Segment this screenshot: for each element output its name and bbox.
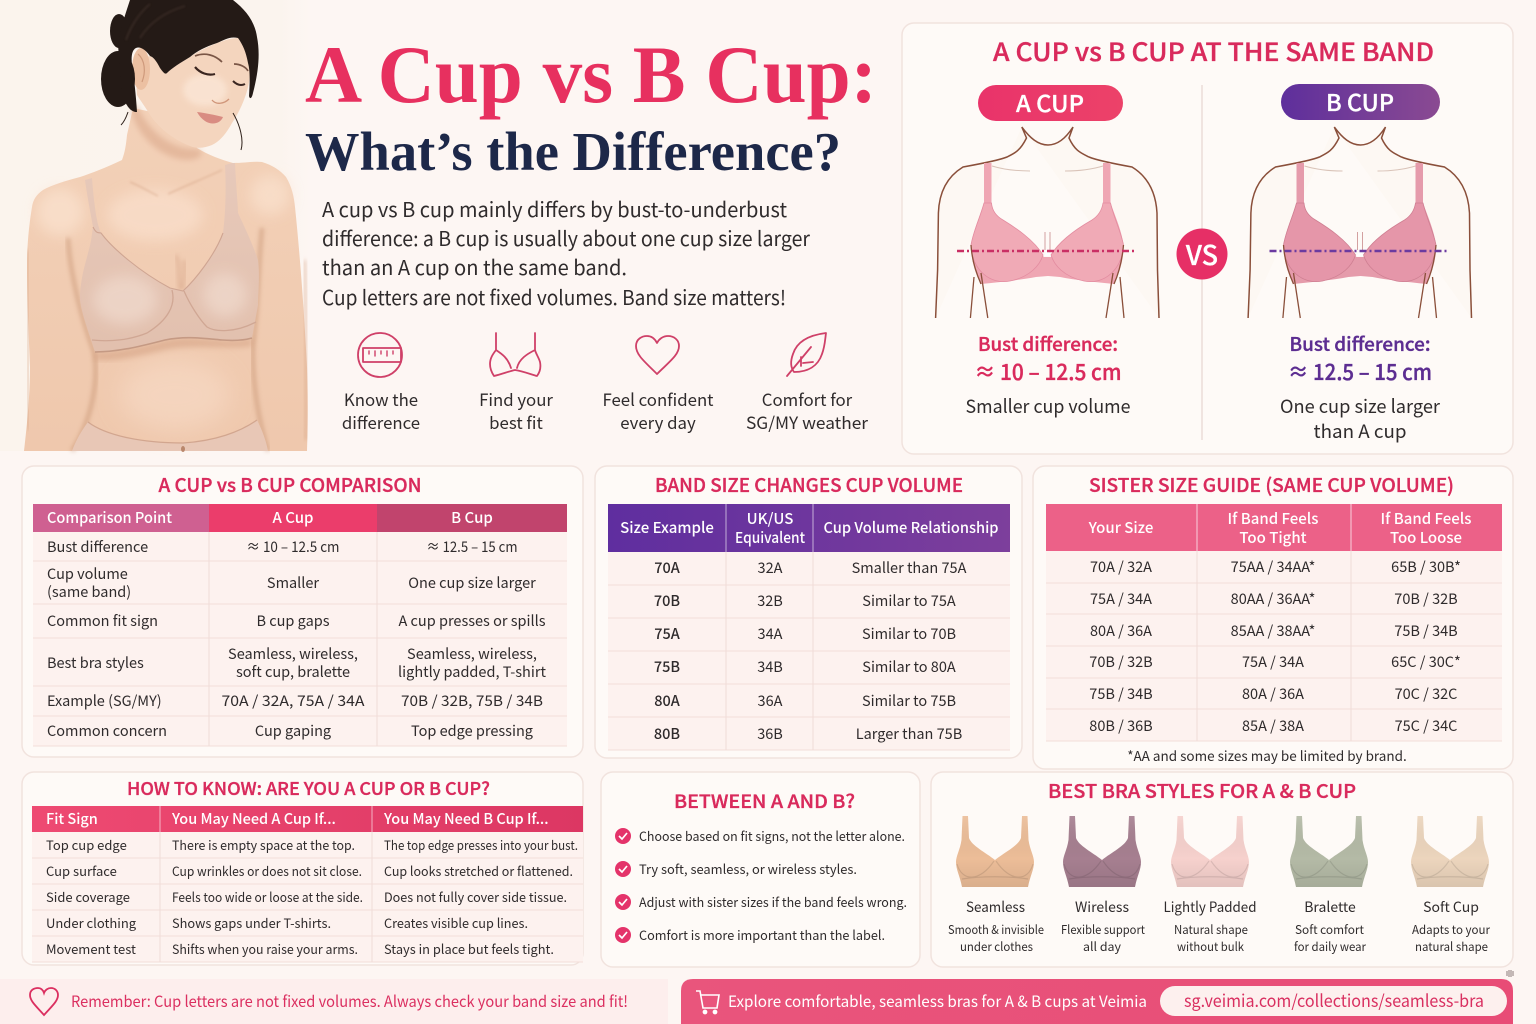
sister size table: 70B / 32B — [1089, 651, 1153, 672]
sister size table: 70A / 32A — [1090, 556, 1152, 577]
icon: heart — [636, 336, 679, 374]
sister size table: 80AA / 36AA* — [1231, 588, 1315, 609]
comparison table: 70B / 32B, 75B / 34B — [401, 690, 543, 711]
fit sign table: Shows gaps under T-shirts. — [172, 913, 331, 932]
comparison table — [33, 504, 567, 746]
intro text: difference: a B cup is usually about one cup size larger — [322, 222, 810, 252]
panel: between A and B — [601, 772, 920, 967]
comparison table: Common fit sign — [47, 610, 158, 631]
sister size table: 70C / 32C — [1395, 683, 1457, 704]
heading: SISTER SIZE GUIDE (SAME CUP VOLUME) — [1089, 471, 1454, 498]
A cup caption — [966, 330, 1130, 419]
band size table: 36B — [757, 723, 783, 744]
style: seamless: Seamless — [966, 897, 1025, 917]
style: lightly padded — [1164, 816, 1256, 955]
fit sign table: Creates visible cup lines. — [384, 913, 528, 932]
band size table: 70B — [654, 590, 680, 611]
comparison table: Cup gaping — [255, 720, 331, 741]
url pill: sg.veimia.com/collections/seamless-bra — [1184, 987, 1484, 1012]
style: seamless: under clothes — [960, 938, 1033, 955]
comparison table: B Cup — [451, 507, 493, 528]
intro text: Cup letters are not fixed volumes. Band size matters! — [322, 281, 786, 311]
band size table: 80A — [654, 690, 681, 711]
icon: leaf — [787, 333, 826, 376]
comparison table: Comparison Point — [47, 507, 172, 528]
style: wireless — [1061, 816, 1145, 955]
benefit: know the difference — [342, 333, 420, 434]
title: A Cup vs B Cup: — [305, 29, 877, 120]
comparison table: Example (SG/MY) — [47, 690, 162, 711]
intro text — [322, 193, 810, 311]
tip 3: Adjust with sister sizes if the band feels wrong. — [639, 892, 907, 911]
band size table: Smaller than 75A — [852, 557, 967, 578]
fit sign table: Side coverage — [46, 887, 130, 906]
sister size table: 75AA / 34AA* — [1231, 556, 1315, 577]
sister size table: 65B / 30B* — [1391, 556, 1461, 577]
comparison table: Seamless, wireless, — [407, 643, 537, 664]
style: soft cup — [1411, 816, 1490, 955]
comparison table: A Cup — [273, 507, 313, 528]
sister size table: 75B / 34B — [1394, 620, 1458, 641]
fit sign table: The top edge presses into your bust. — [384, 835, 578, 854]
comparison table: ≈ 12.5 – 15 cm — [426, 536, 518, 557]
style: lightly padded: without bulk — [1177, 938, 1244, 955]
style: bralette: for daily wear — [1294, 938, 1366, 955]
comparison table: Smaller — [267, 572, 319, 593]
benefit: find your best fit — [479, 333, 553, 434]
sister size table: Too Tight — [1239, 527, 1307, 548]
band size table: 75B — [654, 656, 680, 677]
style: bralette: Bralette — [1304, 897, 1356, 917]
A cup caption: ≈ 10 – 12.5 cm — [974, 355, 1122, 387]
band size table: UK/US — [747, 508, 793, 529]
A cup pill: A CUP — [1016, 85, 1084, 119]
heading: BAND SIZE CHANGES CUP VOLUME — [655, 471, 963, 498]
comparison table: Top edge pressing — [411, 720, 533, 741]
panel: A cup vs B cup at the same band — [902, 23, 1513, 454]
style: soft cup: Adapts to your — [1412, 921, 1490, 938]
comparison table: Seamless, wireless, — [228, 643, 358, 664]
panel: best bra styles — [931, 772, 1513, 967]
comparison table: A cup presses or spills — [398, 610, 546, 631]
sister size table: If Band Feels — [1228, 508, 1318, 529]
sister size table: Too Loose — [1390, 527, 1462, 548]
band size table: Similar to 75B — [862, 690, 956, 711]
comparison table: ≈ 10 – 12.5 cm — [246, 536, 340, 557]
band size table: 75A — [654, 623, 681, 644]
fit sign table: Top cup edge — [46, 835, 127, 854]
sister size table: 75B / 34B — [1089, 683, 1153, 704]
sister size table: 85A / 38A — [1242, 715, 1304, 736]
heading: HOW TO KNOW: ARE YOU A CUP OR B CUP? — [127, 776, 490, 801]
fit sign table: You May Need A Cup If... — [171, 808, 336, 829]
head — [135, 38, 250, 148]
band size table: Size Example — [620, 517, 714, 538]
band size table: 36A — [758, 690, 783, 711]
style: soft cup: natural shape — [1415, 938, 1488, 955]
fit sign table: Cup looks stretched or flattened. — [384, 861, 573, 880]
tip 2: Try soft, seamless, or wireless styles. — [639, 859, 857, 878]
B cup caption: Bust difference: — [1290, 330, 1430, 357]
style: lightly padded: Lightly Padded — [1164, 897, 1256, 917]
B cup caption — [1280, 330, 1441, 444]
fit sign table: Cup wrinkles or does not sit close. — [172, 861, 362, 880]
footnote: *AA and some sizes may be limited by brand. — [1127, 745, 1407, 765]
band size table: 70A — [654, 557, 681, 578]
style: wireless: Wireless — [1075, 897, 1129, 917]
benefit: know the difference: difference — [342, 410, 420, 434]
fit sign table: Under clothing — [46, 913, 137, 932]
sister size table: 80B / 36B — [1089, 715, 1153, 736]
benefit: comfort for SG/MY weather: SG/MY weather — [746, 410, 868, 434]
fit sign table: You May Need B Cup If... — [383, 808, 549, 829]
B cup pill: B CUP — [1326, 84, 1394, 118]
style: lightly padded: Natural shape — [1174, 921, 1248, 938]
tip 4: Comfort is more important than the label. — [639, 925, 885, 944]
band size table — [608, 504, 1010, 750]
benefit: comfort for SG/MY weather — [746, 333, 868, 434]
band size table: 34A — [758, 623, 783, 644]
tip 1: Choose based on fit signs, not the letter alone. — [639, 826, 905, 845]
benefit: feel confident every day — [602, 336, 714, 434]
fit sign table: Fit Sign — [46, 808, 98, 829]
comparison table: lightly padded, T-shirt — [398, 661, 546, 682]
bra — [80, 163, 259, 352]
B cup pill — [1281, 84, 1440, 120]
benefit: know the difference: Know the — [344, 387, 418, 411]
benefit: find your best fit: best fit — [489, 410, 543, 434]
comparison table: Cup volume — [47, 563, 128, 584]
style: wireless: Flexible support — [1061, 921, 1145, 938]
sister size table: 75A / 34A — [1242, 651, 1304, 672]
fit sign table: Movement test — [46, 939, 136, 958]
fit sign table: Shifts when you raise your arms. — [172, 939, 358, 958]
band size table: Cup Volume Relationship — [824, 517, 998, 538]
band size table: 32A — [758, 557, 783, 578]
benefit: feel confident every day: every day — [620, 410, 696, 434]
reminder bar — [0, 979, 668, 1024]
VS badge — [1176, 228, 1228, 280]
sister size table: Your Size — [1088, 517, 1153, 538]
heading: BETWEEN A AND B? — [674, 788, 855, 814]
sister size table: 85AA / 38AA* — [1231, 620, 1315, 641]
band size table: 80B — [654, 723, 680, 744]
intro text: than an A cup on the same band. — [322, 251, 627, 281]
style: soft cup: Soft Cup — [1423, 897, 1479, 917]
band size table: 32B — [757, 590, 783, 611]
comparison table: Common concern — [47, 720, 167, 741]
comparison table: soft cup, bralette — [236, 661, 350, 682]
comparison table: (same band) — [47, 581, 131, 602]
upper body — [24, 108, 308, 451]
B cup caption: One cup size larger — [1280, 393, 1441, 419]
sister size table: 65C / 30C* — [1391, 651, 1461, 672]
fit sign table: Stays in place but feels tight. — [384, 939, 554, 958]
sister size table: 75C / 34C — [1395, 715, 1457, 736]
fit sign table: Feels too wide or loose at the side. — [172, 887, 363, 906]
icon: shopping cart — [696, 991, 719, 1014]
band size table: Equivalent — [735, 527, 805, 548]
facial features — [195, 67, 215, 75]
call to action bar: Explore comfortable, seamless bras for A & B cups at Veimia — [728, 990, 1147, 1012]
fit sign table: Does not fully cover side tissue. — [384, 887, 567, 906]
sister size table: If Band Feels — [1381, 508, 1471, 529]
heading: A CUP vs B CUP COMPARISON — [158, 471, 422, 498]
benefit: feel confident every day: Feel confident — [602, 387, 714, 411]
panel heading: A CUP vs B CUP AT THE SAME BAND — [993, 33, 1434, 69]
bust measurement line — [1270, 250, 1450, 252]
briefs — [72, 420, 268, 451]
comparison table: 70A / 32A, 75A / 34A — [222, 690, 365, 711]
panel: A cup vs B cup comparison — [22, 466, 583, 757]
style: wireless: all day — [1083, 938, 1122, 955]
style: seamless — [948, 816, 1044, 955]
benefit: find your best fit: Find your — [479, 387, 553, 411]
band size table: Similar to 80A — [862, 656, 956, 677]
heading: BEST BRA STYLES FOR A & B CUP — [1048, 777, 1356, 804]
torso illustration: A cup — [936, 127, 1159, 318]
sister size table: 75A / 34A — [1090, 588, 1152, 609]
panel: band size changes cup volume — [595, 466, 1022, 758]
fit sign table: Cup surface — [46, 861, 117, 880]
intro text: A cup vs B cup mainly differs by bust-to-underbust — [322, 193, 787, 223]
call to action bar — [681, 979, 1513, 1024]
B cup caption: than A cup — [1314, 418, 1406, 444]
icon: heart outline — [30, 988, 58, 1015]
bust measurement line — [957, 250, 1137, 252]
photo: woman wearing a nude seamless bra — [0, 0, 310, 452]
torso illustration: B cup — [1248, 127, 1472, 318]
sister size table: 70B / 32B — [1394, 588, 1458, 609]
A cup caption: Bust difference: — [978, 330, 1118, 357]
style: bralette — [1290, 816, 1368, 955]
band size table: Similar to 75A — [862, 590, 956, 611]
sister size table: 80A / 36A — [1242, 683, 1304, 704]
A cup caption: Smaller cup volume — [966, 393, 1130, 419]
icon: bra — [490, 333, 540, 376]
reminder bar: Remember: Cup letters are not fixed volumes. Always check your band size and fit! — [71, 990, 628, 1012]
fit sign table — [32, 806, 583, 962]
hair — [101, 0, 259, 112]
comparison table: Bust difference — [47, 536, 148, 557]
title — [305, 29, 877, 182]
title: What’s the Difference? — [305, 121, 841, 182]
A cup pill — [978, 85, 1123, 121]
panel: sister size guide — [1033, 466, 1513, 769]
sister size table — [1046, 504, 1502, 741]
fit sign table: There is empty space at the top. — [172, 835, 355, 854]
panel: how to know — [22, 772, 583, 965]
benefit: comfort for SG/MY weather: Comfort for — [762, 387, 853, 411]
B cup caption: ≈ 12.5 – 15 cm — [1288, 355, 1432, 387]
band size table: 34B — [757, 656, 783, 677]
band size table: Larger than 75B — [856, 723, 962, 744]
sister size table: 80A / 36A — [1090, 620, 1152, 641]
style: seamless: Smooth & invisible — [948, 921, 1044, 938]
band size table: Similar to 70B — [862, 623, 956, 644]
icon: measuring tape — [358, 333, 402, 377]
comparison table: One cup size larger — [408, 572, 536, 593]
VS badge: VS — [1185, 234, 1218, 273]
comparison table: B cup gaps — [256, 610, 330, 631]
comparison table: Best bra styles — [47, 652, 144, 673]
style: bralette: Soft comfort — [1295, 921, 1364, 938]
